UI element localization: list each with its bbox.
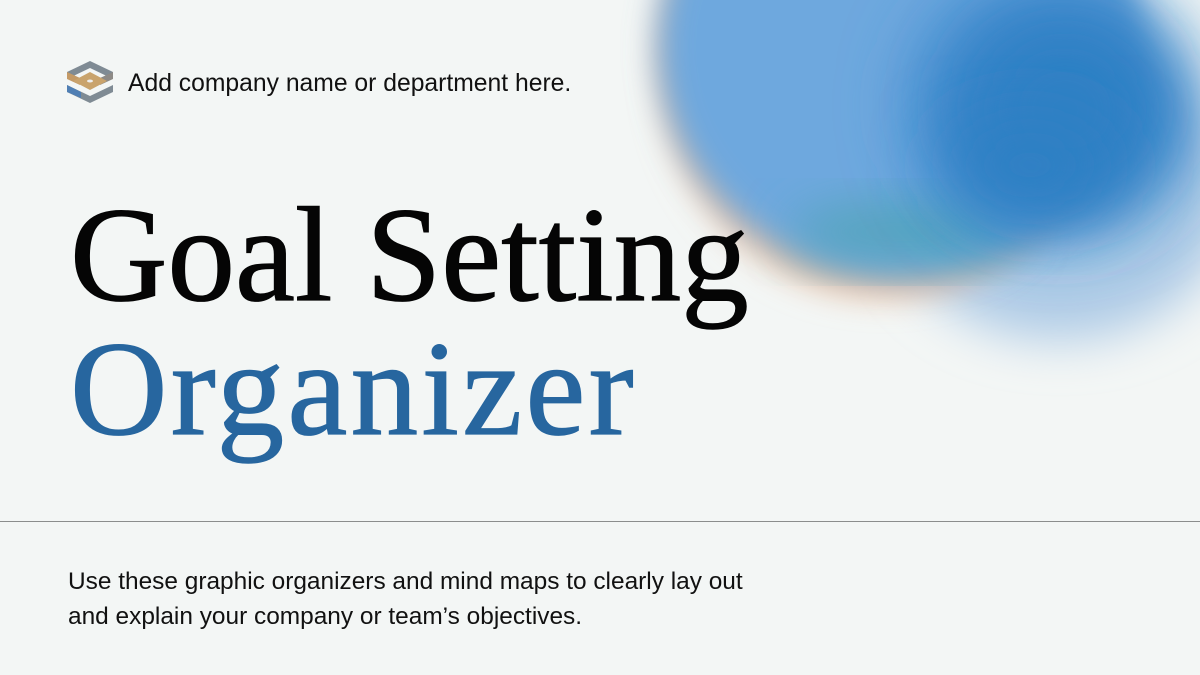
divider (0, 521, 1200, 522)
description (68, 568, 743, 630)
title line 2: Organizer (70, 315, 637, 464)
company name: Add company name or department here. (128, 70, 571, 97)
logo icon (67, 61, 113, 103)
description: Use these graphic organizers and mind maps to clearly lay out (68, 568, 743, 595)
title line 1: Goal Setting (70, 181, 749, 330)
description: and explain your company or team’s objectives. (68, 603, 582, 630)
